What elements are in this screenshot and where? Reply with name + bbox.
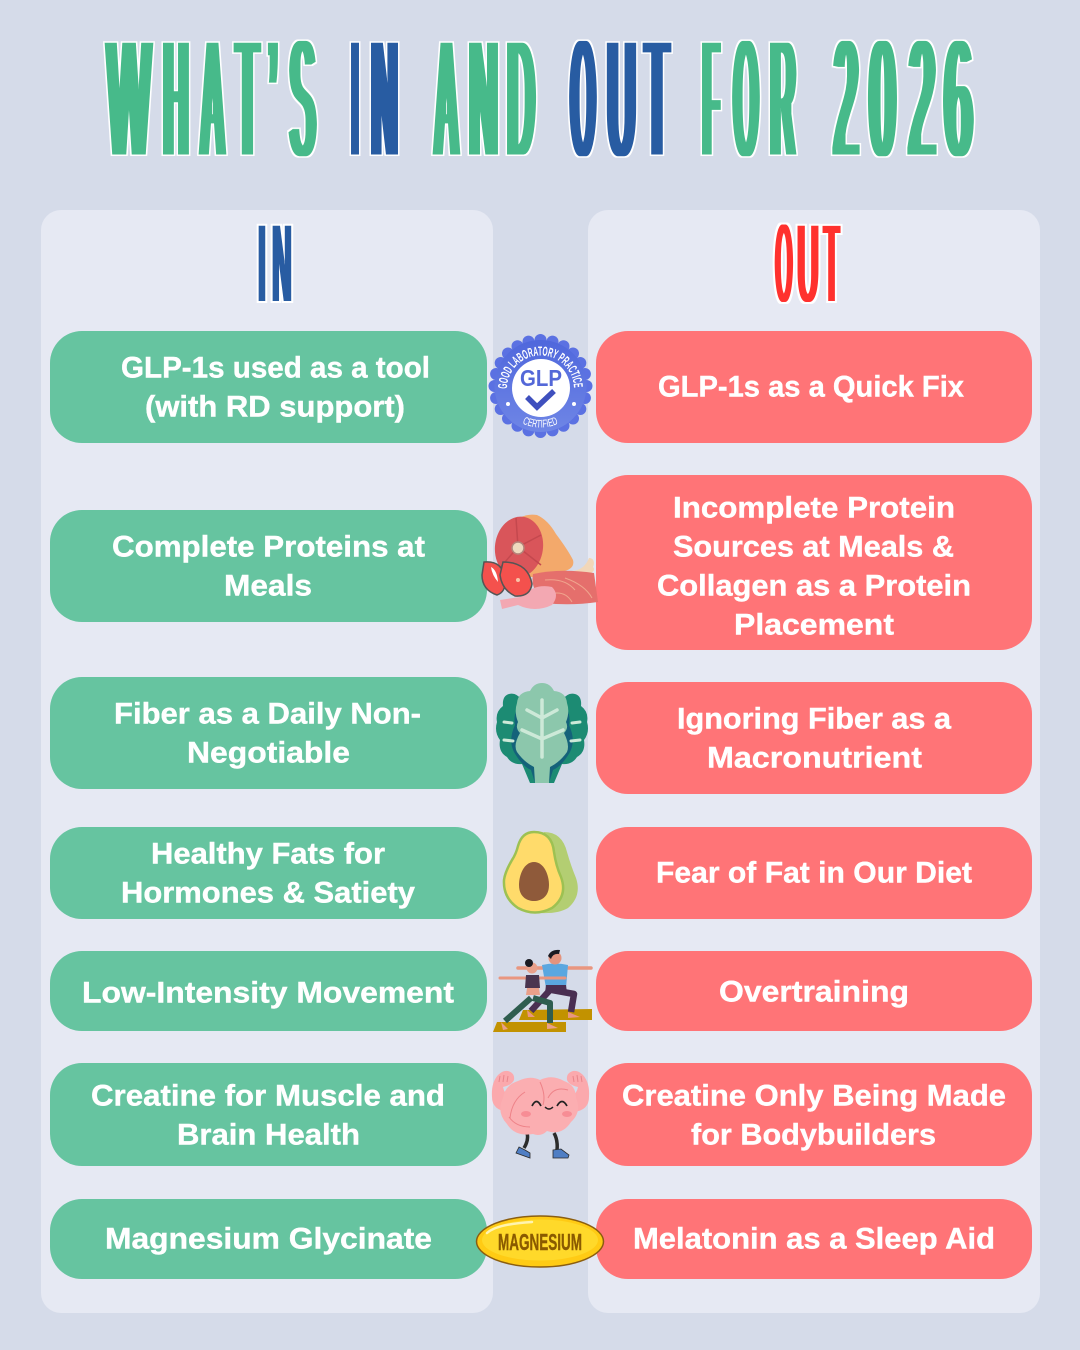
title: 2 <box>834 0 858 198</box>
out item: melatonin <box>596 1199 1032 1279</box>
title: W <box>107 0 151 198</box>
in item: movement <box>50 951 487 1031</box>
in item: fats: Healthy Fats for <box>151 838 385 870</box>
title: I <box>353 0 357 198</box>
icon: GLP badge: GOOD LABORATORY PRACTICE <box>498 346 583 388</box>
panel: in: N <box>272 198 292 330</box>
out item: incomplete protein <box>596 475 1032 650</box>
in item: creatine <box>50 1063 487 1166</box>
icon: GLP badge <box>488 334 592 438</box>
in item: fiber: Negotiable <box>187 736 350 770</box>
title: R <box>771 0 795 198</box>
in item: movement: Low-Intensity Movement <box>82 976 454 1010</box>
out item: incomplete protein: Incomplete Protein <box>673 492 955 524</box>
panel: out <box>588 198 1040 1313</box>
icon: yoga couple <box>493 950 592 1032</box>
title: ’ <box>269 0 277 198</box>
in item: magnesium: Magnesium Glycinate <box>105 1222 432 1256</box>
in item: fiber: Fiber as a Daily Non- <box>114 698 421 730</box>
panel: out: U <box>797 198 819 330</box>
out item: quick fix <box>596 331 1032 443</box>
in item: fats <box>50 827 487 919</box>
out item: melatonin: Melatonin as a Sleep Aid <box>633 1222 995 1256</box>
title: T <box>645 0 669 198</box>
in item: GLP-1s <box>50 331 487 443</box>
icon: meat <box>482 513 598 609</box>
out item: incomplete protein: Sources at Meals & <box>673 530 954 564</box>
title: T <box>236 0 259 198</box>
out item: incomplete protein: Placement <box>734 608 894 642</box>
in item: magnesium <box>50 1199 487 1279</box>
icon: magnesium capsule <box>476 1216 604 1267</box>
title: 2 <box>909 0 936 198</box>
title: U <box>608 0 636 198</box>
text: 6 <box>944 0 973 198</box>
in item: fats: Hormones & Satiety <box>121 876 415 910</box>
out item: overtraining <box>596 951 1032 1031</box>
panel: out: T <box>824 198 839 330</box>
title: A <box>200 0 225 198</box>
out item: ignoring fiber <box>596 682 1032 794</box>
out item: ignoring fiber: Macronutrient <box>707 742 922 774</box>
title: H <box>164 0 188 198</box>
out item: fear of fat <box>596 827 1032 919</box>
icon: magnesium capsule: MAGNESIUM <box>498 1229 582 1255</box>
out item: ignoring fiber: Ignoring Fiber as a <box>677 702 951 736</box>
icon: kale <box>496 683 588 783</box>
out item: fear of fat: Fear of Fat in Our Diet <box>656 856 972 890</box>
title: N <box>372 0 397 198</box>
out item: overtraining: Overtraining <box>719 976 909 1008</box>
heading: out: O <box>775 198 793 330</box>
in item: proteins: Complete Proteins at <box>112 530 425 564</box>
icon: GLP badge: CERTIFIED <box>524 417 558 428</box>
icon: muscular brain <box>492 1071 589 1158</box>
icon: GLP badge: GLP <box>520 365 562 391</box>
title: S <box>290 0 316 198</box>
out item: quick fix: GLP-1s as a Quick Fix <box>658 370 964 404</box>
title: F <box>703 0 719 198</box>
in item: GLP-1s: GLP-1s used as a tool <box>121 352 430 384</box>
icon: avocado <box>504 832 578 913</box>
out item: creatine bodybuilders <box>596 1063 1032 1166</box>
out item: creatine bodybuilders: for Bodybuilders <box>691 1118 936 1152</box>
out item: incomplete protein: Collagen as a Protein <box>657 570 971 602</box>
title: 0 <box>869 0 896 198</box>
title: A <box>434 0 459 198</box>
in item: creatine: Creatine for Muscle and <box>91 1080 445 1112</box>
title: D <box>508 0 535 198</box>
in item: creatine: Brain Health <box>177 1118 360 1152</box>
title <box>107 0 973 198</box>
title: O <box>734 0 758 198</box>
in item: GLP-1s: (with RD support) <box>145 390 405 424</box>
in item: proteins <box>50 510 487 622</box>
out item: creatine bodybuilders: Creatine Only Being Made <box>622 1080 1006 1112</box>
in item: proteins: Meals <box>224 570 312 602</box>
title: N <box>469 0 498 198</box>
heading: in: I <box>258 198 265 330</box>
panel: in <box>41 198 493 1313</box>
title: O <box>571 0 595 198</box>
in item: fiber <box>50 677 487 789</box>
